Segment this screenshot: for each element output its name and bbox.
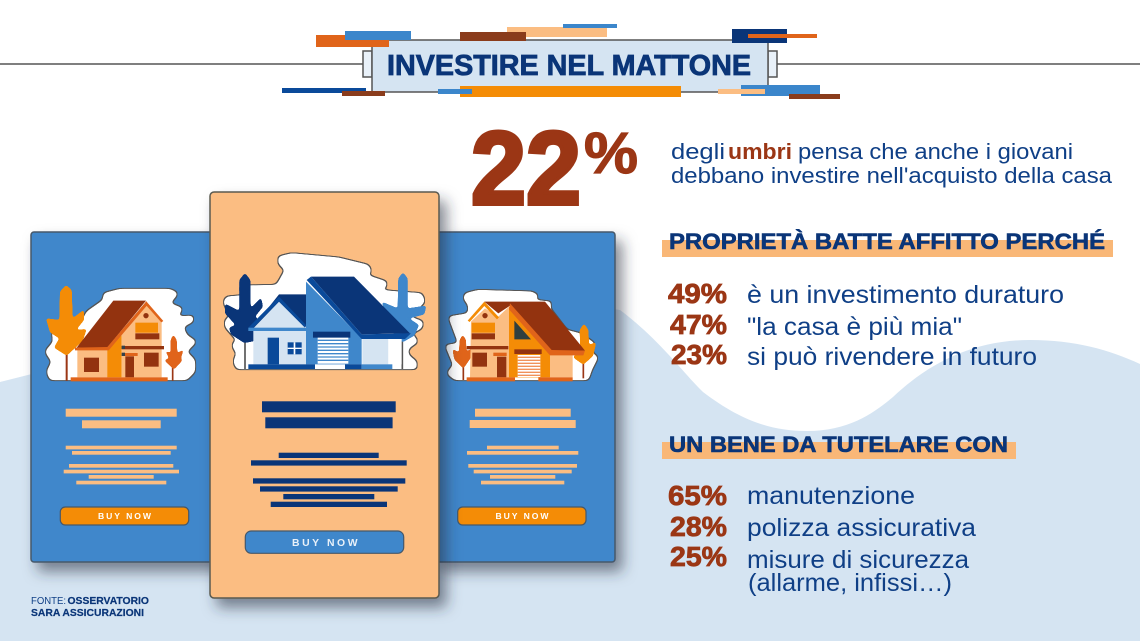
list: reasons	[668, 278, 1064, 371]
stat: 47%: "la casa è più mia"	[747, 313, 962, 341]
stat: 23%: si può rivendere in futuro	[747, 343, 1037, 371]
headline description: degli	[671, 139, 725, 164]
stat: 28%	[670, 511, 976, 542]
stat: 28%: polizza assicurativa	[747, 514, 976, 542]
card: right blue	[433, 232, 615, 562]
card: left blue	[31, 232, 217, 562]
button: buy now: BUY NOW	[496, 511, 549, 521]
stat: 25%	[670, 541, 969, 597]
source note: OSSERVATORIO	[68, 595, 149, 607]
card: centre peach	[210, 192, 439, 598]
text placeholder bars	[467, 409, 578, 484]
source note	[31, 595, 149, 619]
background wave	[0, 305, 1140, 641]
stat: 49%: è un investimento duraturo	[747, 281, 1064, 309]
headline description: umbri	[728, 139, 792, 164]
stat: 25%: 25%	[670, 541, 727, 572]
text placeholder bars	[251, 401, 407, 507]
stat: 47%	[670, 309, 962, 341]
headline stat 22%: %	[584, 121, 638, 186]
heading: proprietà batte affitto perché: PROPRIETÀ BATTE AFFITTO PERCHÉ	[669, 229, 1105, 254]
button: buy now: BUY NOW	[292, 538, 358, 549]
stat: 23%: 23%	[671, 339, 727, 370]
headline description	[671, 139, 1113, 188]
headline description: pensa che anche i giovani	[798, 139, 1073, 164]
stat: 25%: (allarme, infissi…)	[748, 569, 952, 597]
icon: orange house with garage	[445, 290, 598, 381]
headline stat 22%: 22	[471, 111, 581, 227]
icon: blue house	[223, 253, 426, 369]
icon: orange house	[45, 285, 197, 381]
button: buy now	[60, 507, 189, 525]
text placeholder bars	[64, 409, 179, 484]
stat: 65%: 65%	[668, 480, 727, 511]
title: INVESTIRE NEL MATTONE	[387, 50, 751, 82]
stat: 47%: 47%	[670, 309, 727, 340]
stat: 65%: manutenzione	[747, 482, 915, 510]
source note: FONTE:	[31, 595, 66, 607]
source note: SARA ASSICURAZIONI	[31, 607, 144, 619]
title banner	[0, 24, 1140, 99]
button: buy now	[458, 507, 586, 525]
stat: 49%	[668, 278, 1064, 309]
list: protections	[668, 480, 976, 597]
stat: 65%	[668, 480, 915, 511]
stat: 28%: 28%	[670, 511, 727, 542]
button: buy now: BUY NOW	[98, 511, 152, 521]
button: buy now	[245, 531, 404, 553]
heading: un bene da tutelare con: UN BENE DA TUTELARE CON	[669, 432, 1008, 457]
stat: 25%: misure di sicurezza	[747, 546, 969, 574]
stat: 23%	[671, 339, 1037, 371]
headline description: debbano investire nell'acquisto della casa	[671, 163, 1113, 188]
headline stat 22%	[471, 111, 638, 227]
stat: 49%: 49%	[668, 278, 727, 309]
